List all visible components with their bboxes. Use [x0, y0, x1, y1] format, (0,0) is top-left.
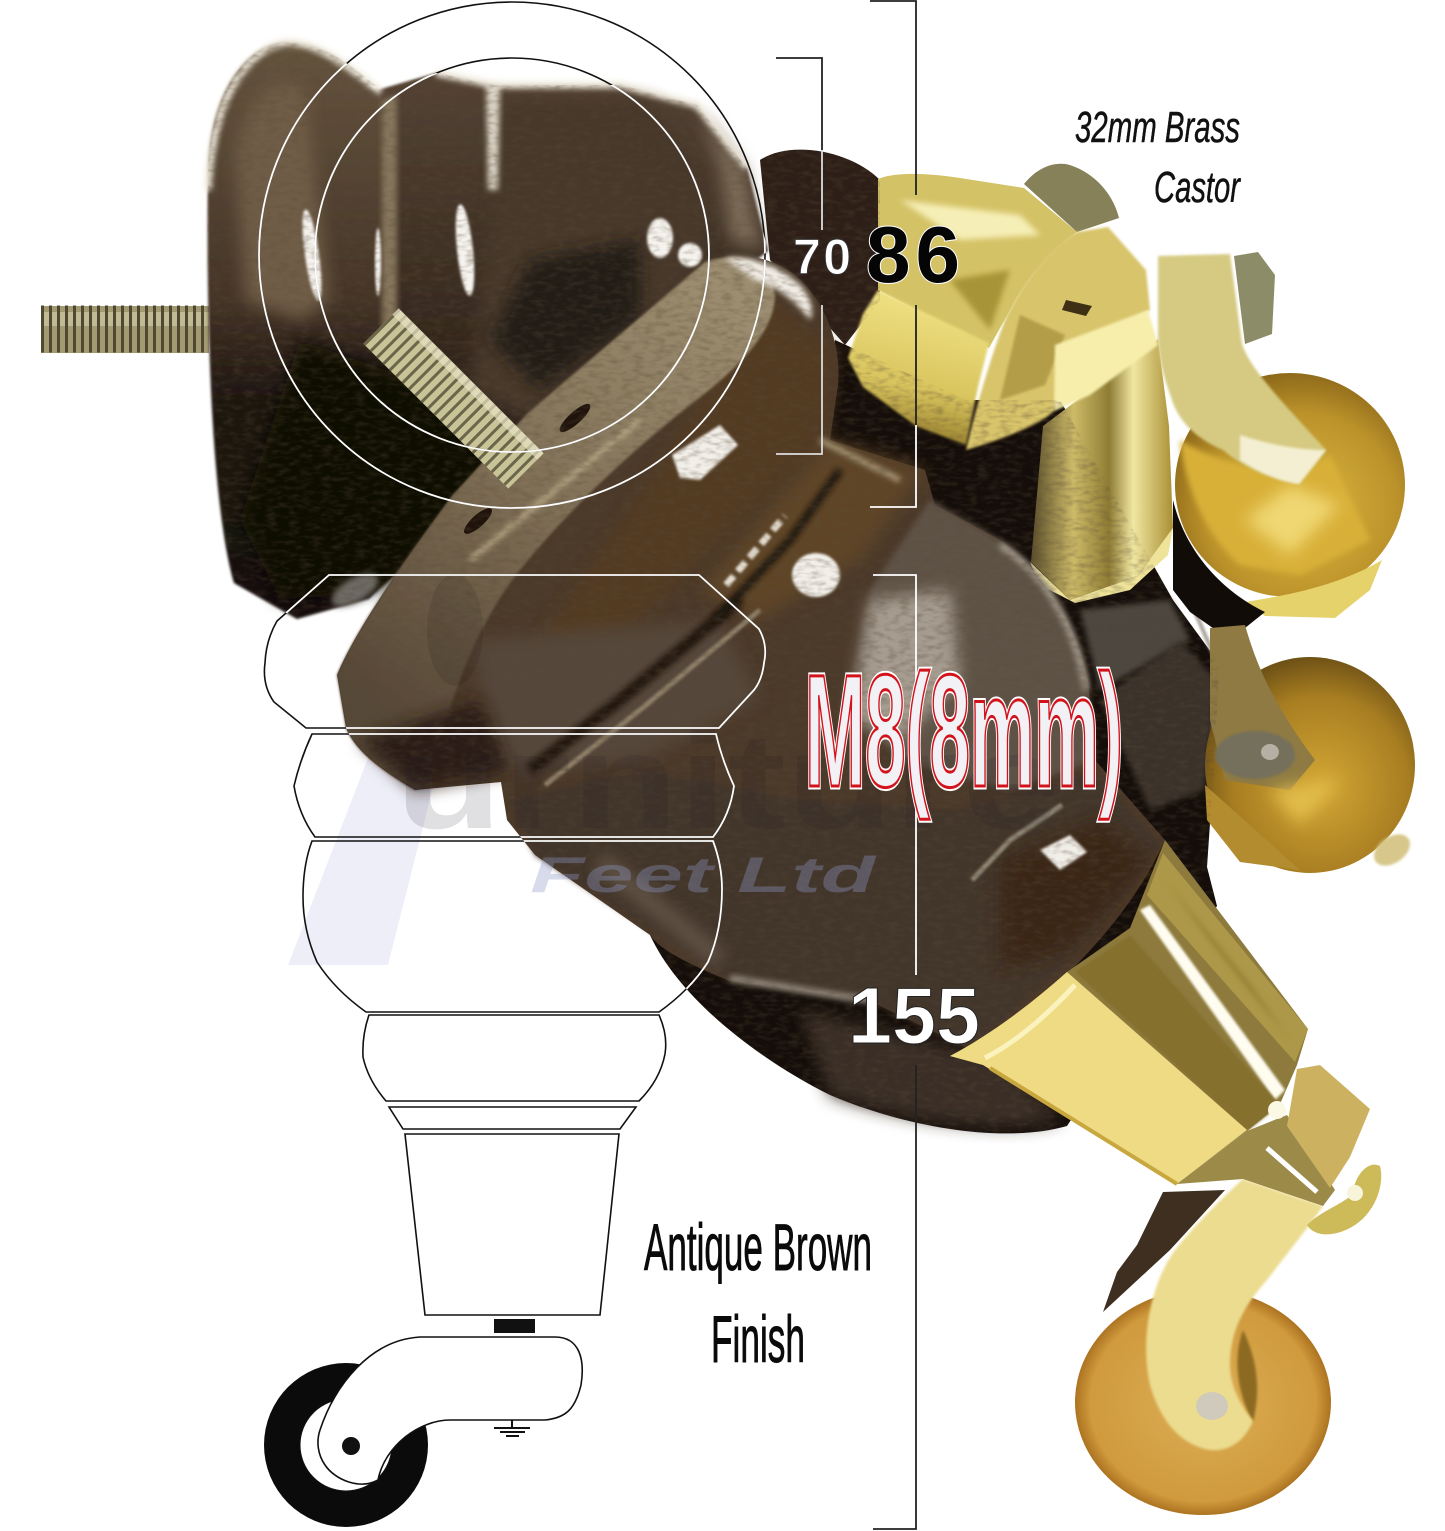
label: finish: Finish — [711, 1302, 805, 1376]
lower bulb — [510, 770, 1160, 1050]
lower brass wheel — [1075, 1190, 1331, 1515]
front wooden foot — [337, 256, 1165, 1050]
front threaded bolt — [363, 308, 544, 489]
technical line drawing: castor — [264, 1319, 582, 1527]
label: M8 thread size — [805, 641, 1123, 820]
turned ribs — [530, 440, 1062, 880]
technical line drawing: top view circles (black on paper) — [259, 2, 765, 508]
dimension line: 155 overall height — [873, 575, 916, 1529]
lower castor arm — [1146, 1179, 1323, 1450]
rear foot shading — [208, 42, 762, 600]
label: 155: 155 — [848, 971, 980, 1060]
upper wooden knob behind castor — [760, 150, 880, 345]
foot silhouette — [337, 256, 1165, 1050]
column — [1031, 339, 1173, 600]
label: 86: 86 — [866, 210, 960, 299]
sleeve — [878, 174, 1077, 348]
rear foot disc — [208, 42, 460, 619]
rear threaded bolt — [41, 306, 209, 353]
wheel one — [1175, 373, 1405, 597]
arm screw — [1234, 252, 1275, 344]
upper rear wooden foot — [208, 42, 768, 619]
watermark: dark overlay lettering: urniture — [395, 705, 1060, 857]
watermark: dark overlay lettering — [395, 574, 1060, 857]
wheel two — [1205, 657, 1415, 873]
upper bulb — [850, 500, 1095, 790]
rear foot specular highlights — [299, 203, 702, 613]
upper band — [1147, 853, 1308, 1062]
label: finish — [644, 1210, 872, 1376]
upper brass castor — [848, 164, 1326, 603]
watermark: company line: Feet Ltd — [530, 847, 878, 903]
label: brass castor: Castor — [1154, 163, 1242, 212]
cap fixing holes — [556, 400, 594, 436]
top cap — [337, 257, 775, 790]
label: finish: Antique Brown — [644, 1210, 872, 1284]
label: brass castor: 32mm Brass — [1075, 103, 1240, 152]
screw head — [1024, 164, 1119, 232]
lower brass ferrule — [950, 840, 1308, 1184]
technical line drawing: white overlay on photo — [259, 2, 765, 1012]
white reflection — [1140, 905, 1285, 1100]
label: 70: 70 — [793, 229, 851, 285]
rust tone band — [540, 300, 835, 660]
watermark: pale letter seven — [288, 740, 445, 965]
swivel arm — [1158, 254, 1326, 484]
axle pin — [1196, 1392, 1228, 1420]
rear foot body — [320, 73, 768, 599]
ring cylinder — [848, 290, 989, 445]
dark gap under wheel one — [1173, 500, 1265, 640]
wood grain texture — [200, 30, 1230, 1140]
front pale band — [950, 972, 1247, 1184]
middle band — [1075, 935, 1280, 1131]
grey middle — [470, 620, 760, 770]
dimension line: 70 diameter — [776, 58, 822, 454]
dark wood behind brass — [650, 340, 1219, 1133]
foot specular highlights — [672, 425, 1087, 870]
upper brass ball wheels — [1173, 373, 1416, 873]
technical line drawing: foot profile (black on paper) — [264, 575, 765, 1315]
lower castor knuckle — [1177, 1065, 1381, 1234]
label: brass castor — [1075, 103, 1242, 212]
clamp flange — [966, 227, 1150, 450]
dimension line: 86 upper height — [870, 1, 916, 507]
